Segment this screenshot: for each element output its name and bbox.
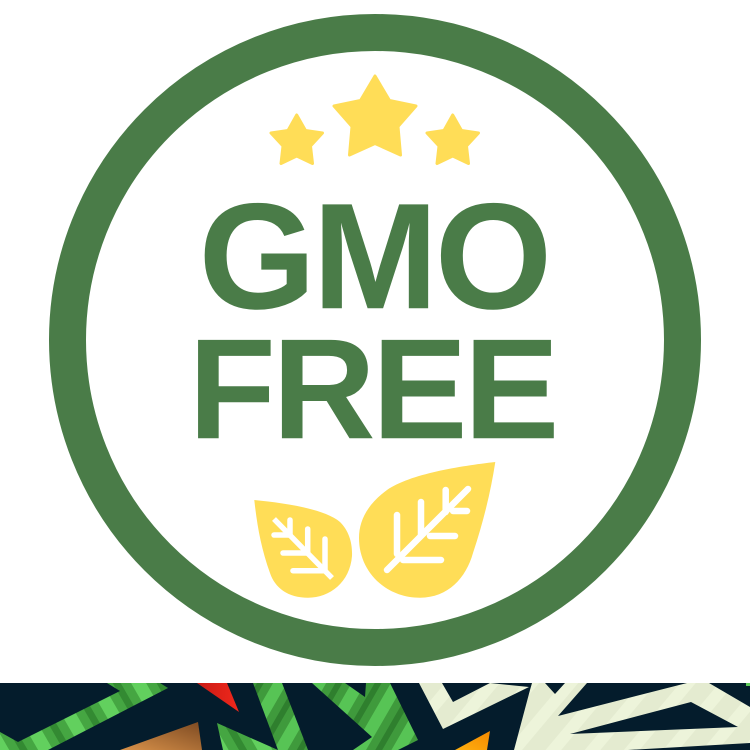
green circular ring — [68, 32, 682, 648]
heading line: GMO: GMO — [198, 171, 549, 340]
icon: small leaf — [254, 500, 352, 598]
three yellow stars — [271, 76, 478, 164]
green shard centre — [253, 683, 308, 750]
cream lattice — [514, 683, 750, 750]
green shard right — [312, 683, 418, 750]
icon: two yellow leaves — [254, 462, 495, 598]
orange shard — [455, 731, 490, 750]
centre star — [334, 76, 416, 155]
green triangle — [217, 723, 278, 750]
icon: large leaf — [359, 462, 495, 598]
green corner accent — [746, 683, 750, 686]
left star — [271, 115, 322, 164]
heading: GMO FREE — [188, 171, 556, 469]
heading line: FREE: FREE — [188, 310, 556, 469]
bottom decorative geometric band — [0, 683, 750, 750]
red shard — [197, 683, 239, 712]
cream chevron — [419, 683, 529, 729]
green shard left — [0, 683, 168, 750]
right star — [427, 115, 478, 164]
brown shard — [120, 722, 202, 750]
